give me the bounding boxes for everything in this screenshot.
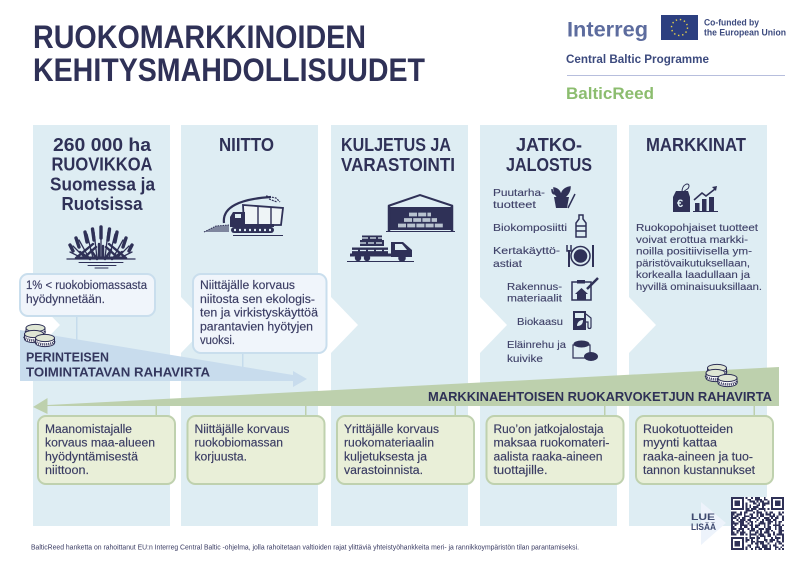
box: processor pays: maksaa ruokomateri-: [494, 438, 610, 450]
panel: markets: [636, 135, 762, 293]
box: sales cover costs: Ruokotuotteiden: [643, 424, 733, 436]
box: entrepreneur compensation: [337, 406, 474, 484]
item: building materials: Rakennus-: [507, 281, 563, 293]
label: market-based cash flow: MARKKINAEHTOISEN RUOKARVOKETJUN RAHAVIRTA: [428, 389, 773, 404]
item: biocomposite: Biokomposiitti: [493, 222, 567, 234]
item: disposable tableware: Kertakäyttö-: [493, 245, 561, 257]
box: landowner compensation: niittoon.: [45, 465, 89, 477]
item: feed and bedding: kuivike: [507, 353, 543, 365]
icon: euro price tag: €: [677, 198, 683, 210]
callout: compensation for ecological benefits: ten ja virkistyskäyttöä: [200, 308, 319, 320]
box: sales cover costs: myynti kattaa: [643, 438, 718, 450]
item: garden products: Puutarha-: [493, 187, 546, 199]
heading: JATKO-JALOSTUS: [506, 135, 592, 175]
item: garden products: tuotteet: [493, 199, 536, 211]
text: market advantages: voivat erottua markki-: [636, 234, 749, 246]
heading: MARKKINAT: MARKKINAT: [646, 135, 746, 155]
item: building materials: [507, 278, 598, 304]
text: market advantages: noilla positiivisella ym-: [636, 246, 753, 258]
item: disposable tableware: astiat: [493, 258, 522, 270]
text: Central Baltic Programme: Central Baltic Programme: [566, 54, 709, 66]
callout: compensation for ecological benefits: Niittäjälle korvaus: [200, 280, 295, 292]
callout: compensation for ecological benefits: vuoksi.: [200, 335, 235, 347]
heading: KULJETUS JA VARASTOINTI: [341, 135, 455, 175]
heading: JATKO-JALOSTUS: JALOSTUS: [506, 155, 592, 175]
item: feed and bedding: [507, 339, 598, 365]
heading: KULJETUS JA VARASTOINTI: VARASTOINTI: [341, 155, 455, 175]
text: co-funded by the European Union: Co-funded by: [704, 18, 759, 28]
text: read more: LUE: [691, 512, 715, 522]
box: harvester compensation: [188, 406, 324, 484]
box: landowner compensation: [38, 406, 175, 484]
box: harvester compensation: ruokobiomassan: [194, 438, 283, 450]
box: landowner compensation: korvaus maa-alueen: [45, 438, 155, 450]
text: co-funded by the European Union: [704, 18, 786, 38]
callout: under one percent used: [20, 274, 155, 352]
logo: BalticReed: BalticReed: [566, 84, 654, 103]
icon: truck with bales: [347, 238, 414, 262]
text: read more: [691, 512, 716, 532]
arrow: market-based cash flow: [33, 364, 779, 414]
panel: column backgrounds with chevrons: [33, 125, 767, 526]
text: market advantages: [636, 222, 762, 293]
label: traditional cash flow: PERINTEISEN: [26, 350, 109, 364]
callout: compensation for ecological benefits: [193, 274, 326, 375]
heading: NIITTO: NIITTO: [219, 135, 274, 155]
text: market advantages: päristövaikutuksellaan,: [636, 258, 750, 270]
box: processor pays: Ruo’on jatkojalostaja: [494, 424, 604, 436]
item: garden products: [493, 187, 575, 211]
icon: euro price tag: [673, 184, 690, 212]
panel: mowing: [193, 135, 326, 375]
icon: coins: [24, 324, 54, 347]
box: sales cover costs: [636, 406, 773, 484]
logo: Interreg: Interreg: [567, 18, 648, 42]
box: processor pays: tuottajille.: [494, 465, 548, 477]
callout: compensation for ecological benefits: parantavien hyötyjen: [200, 322, 313, 334]
icon: growth chart: [693, 186, 718, 212]
icon: reed harvester: [204, 196, 283, 236]
box: sales cover costs: tannon kustannukset: [643, 465, 756, 477]
text: market advantages: Ruokopohjaiset tuotteet: [636, 222, 758, 234]
item: feed and bedding: Eläinrehu ja: [507, 339, 566, 351]
text: market advantages: korkealla laadullaan ja: [636, 269, 750, 281]
heading: 260 000 ha: Ruotsissa: [62, 194, 143, 214]
box: entrepreneur compensation: varastoinnista.: [344, 465, 423, 477]
arrow: traditional cash flow: [20, 324, 307, 387]
heading: 260 000 ha: RUOVIKKOA: [52, 154, 152, 174]
box: sales cover costs: raaka-aineen ja tuo-: [643, 452, 753, 464]
item: building materials: materiaalit: [507, 292, 562, 304]
box: processor pays: aalista raaka-aineen: [494, 452, 602, 464]
QR code: [731, 497, 784, 550]
label: traditional cash flow: [26, 350, 210, 380]
callout: under one percent used: hyödynnetään.: [26, 294, 105, 306]
heading: 260 000 ha: 260 000 ha: [53, 135, 152, 155]
footer note: BalticReed hanketta on rahoittanut EU:n Interreg Central Baltic -ohjelma, jolla rahoitetaan valtioiden rajat ylittäviä yhteistyöhankkeita meri- ja rannikkoympäristön tilan parantamiseksi.: [31, 544, 579, 552]
text: market advantages: hyvillä ominaisuuksillaan.: [636, 281, 762, 293]
box: entrepreneur compensation: kuljetuksesta ja: [344, 452, 428, 464]
item: biocomposite: [493, 215, 586, 237]
heading: JATKO-JALOSTUS: JATKO-: [516, 135, 582, 155]
callout: compensation for ecological benefits: niitosta sen ekologis-: [200, 294, 315, 306]
title: KEHITYSMAHDOLLISUUDET: [33, 52, 425, 88]
box: entrepreneur compensation: Yrittäjälle korvaus: [344, 424, 439, 436]
heading: KULJETUS JA VARASTOINTI: KULJETUS JA: [341, 135, 451, 155]
box: landowner compensation: Maanomistajalle: [45, 424, 132, 436]
box: processor pays: [486, 406, 624, 484]
callout: under one percent used: 1% < ruokobiomassasta: [26, 280, 148, 292]
panel: reed beds: [20, 135, 156, 352]
icon: storage shed: [386, 195, 455, 232]
title: [33, 19, 425, 88]
icon: reeds: [67, 227, 135, 268]
box: harvester compensation: Niittäjälle korvaus: [194, 424, 290, 436]
item: biogas: Biokaasu: [517, 316, 563, 328]
box: landowner compensation: hyödyntämisestä: [45, 452, 139, 464]
text: read more: LISÄÄ: [691, 522, 716, 532]
icon: EU flag: [661, 15, 698, 40]
text: co-funded by the European Union: the European Union: [704, 28, 786, 38]
panel: further processing: [493, 135, 598, 365]
arrow: read more: [701, 502, 726, 545]
item: biogas: [517, 311, 591, 330]
icon: coins: [706, 364, 737, 387]
item: disposable tableware: [493, 245, 593, 270]
heading: 260 000 ha: [50, 135, 156, 214]
logos: Interreg, EU and BalticReed: [566, 15, 786, 103]
box: entrepreneur compensation: ruokomateriaalin: [344, 438, 434, 450]
heading: 260 000 ha: Suomessa ja: [50, 174, 156, 194]
title: RUOKOMARKKINOIDEN: [33, 19, 366, 55]
panel: transport and storage: [341, 135, 455, 262]
box: harvester compensation: korjuusta.: [194, 452, 247, 464]
label: traditional cash flow: TOIMINTATAVAN RAHAVIRTA: [26, 366, 210, 380]
